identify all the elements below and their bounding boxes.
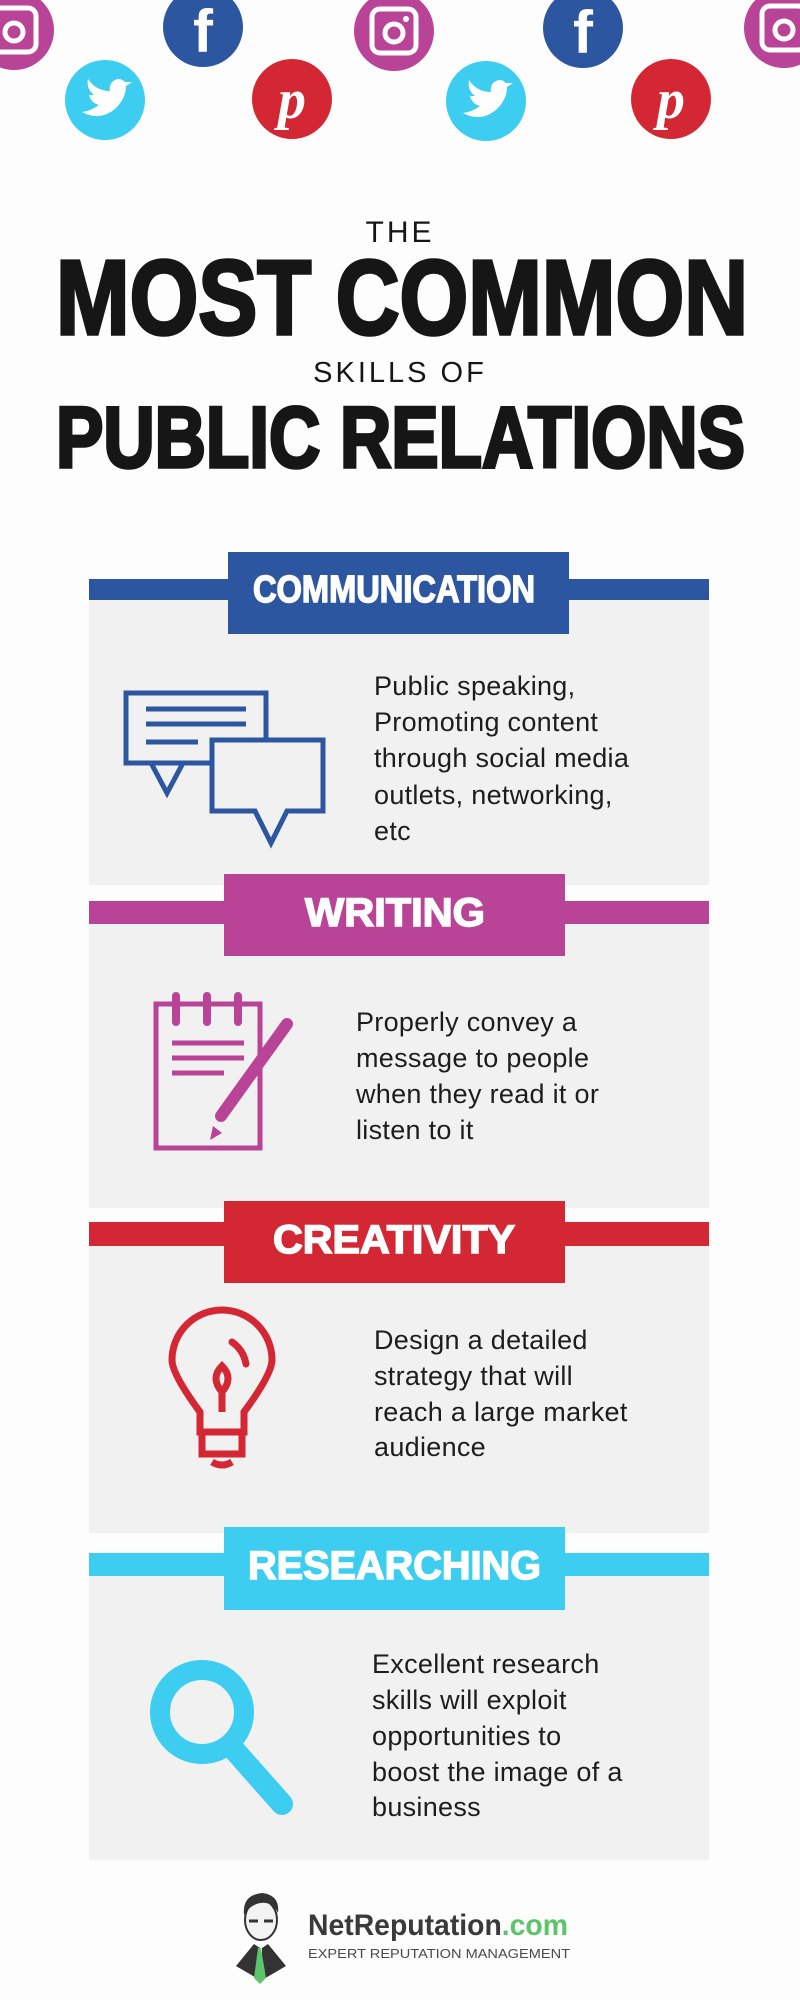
heading: researching: [224, 1527, 565, 1610]
icon: facebook 2: f: [573, 0, 594, 66]
text: communication: through social media: [374, 743, 630, 773]
text: researching: opportunities to: [372, 1721, 561, 1751]
panel: researching: [89, 1527, 709, 1860]
icon: pinterest 1: p: [274, 69, 306, 131]
panel: creativity: [89, 1201, 709, 1533]
title: THE: [366, 216, 434, 249]
icon: chat bubbles: [126, 693, 323, 843]
icon: pinterest 2: p: [653, 69, 685, 131]
heading: communication: [228, 552, 569, 634]
title: SKILLS OF: [313, 357, 487, 389]
text: creativity: Design a detailed: [374, 1325, 588, 1355]
icon: light bulb: [172, 1310, 272, 1465]
logo: NetReputation: NetReputation.com: [308, 1909, 568, 1942]
text: researching: Excellent research: [372, 1649, 600, 1679]
heading: creativity: CREATIVITY: [273, 1218, 515, 1262]
text: researching: business: [372, 1792, 481, 1822]
icon: twitter 2: [446, 61, 526, 141]
icon: notepad and pencil: [156, 996, 287, 1148]
social icons row: [0, 0, 800, 141]
heading: creativity: [224, 1201, 565, 1283]
icon: man avatar: [236, 1893, 286, 1984]
icon: instagram 2: [354, 0, 434, 71]
panel: communication: [89, 552, 709, 885]
text: communication: Promoting content: [374, 707, 598, 737]
icon: pinterest 2: [631, 59, 711, 139]
text: communication: outlets, networking,: [374, 780, 613, 810]
icon: twitter 1: [65, 60, 145, 140]
heading: communication: COMMUNICATION: [253, 569, 535, 611]
logo: NetReputation: [236, 1893, 570, 1984]
icon: facebook 1: [163, 0, 243, 67]
text: writing: Properly convey a: [356, 1007, 578, 1037]
text: communication: Public speaking,: [374, 671, 575, 701]
icon: magnifier: [160, 1670, 282, 1804]
heading: researching: RESEARCHING: [248, 1544, 541, 1588]
icon: pinterest 1: [252, 59, 332, 139]
title: [56, 216, 748, 486]
icon: facebook 1: f: [193, 0, 214, 65]
text: creativity: strategy that will: [374, 1361, 573, 1391]
text: writing: message to people: [356, 1043, 589, 1073]
text: researching: boost the image of a: [372, 1757, 623, 1787]
icon: instagram 3: [744, 0, 800, 68]
icon: instagram 1: [0, 0, 54, 70]
heading: writing: [224, 874, 565, 956]
text: writing: listen to it: [356, 1115, 474, 1145]
text: creativity: reach a large market: [374, 1397, 628, 1427]
text: writing: when they read it or: [355, 1079, 599, 1109]
text: researching: skills will exploit: [372, 1685, 567, 1715]
panel: writing: [89, 874, 709, 1208]
heading: writing: WRITING: [305, 891, 485, 935]
text: creativity: audience: [374, 1432, 486, 1462]
icon: facebook 2: [543, 0, 623, 68]
logo: NetReputation: EXPERT REPUTATION MANAGEMENT: [308, 1946, 570, 1961]
text: communication: etc: [374, 816, 411, 846]
